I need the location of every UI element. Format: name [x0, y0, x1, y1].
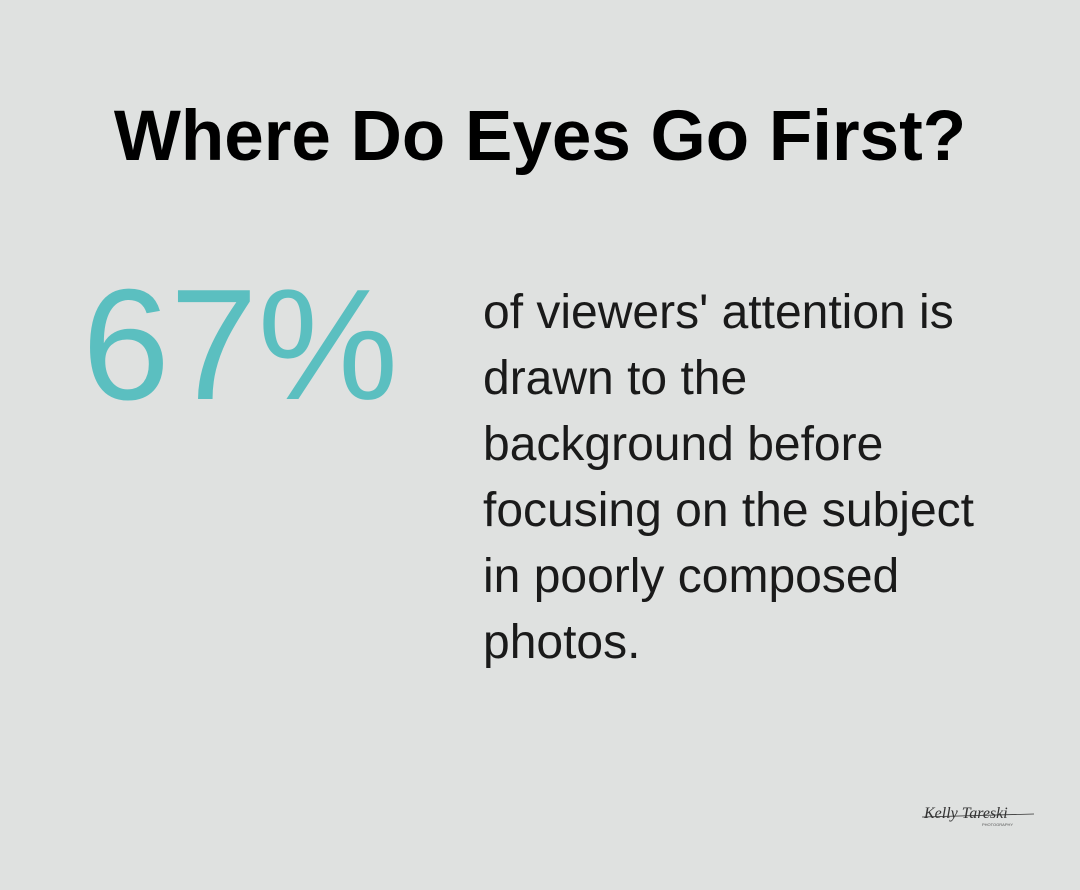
description text [483, 286, 974, 669]
description text: focusing on the subject [483, 484, 974, 537]
signature logo: Kelly Tareski [923, 805, 1008, 822]
title: Where Do Eyes Go First? [114, 97, 966, 176]
signature logo: PHOTOGRAPHY [982, 822, 1013, 827]
description text: background before [483, 418, 883, 471]
big statistic: 67% [82, 257, 398, 433]
description text: in poorly composed [483, 550, 899, 603]
description text: drawn to the [483, 352, 747, 405]
description text: photos. [483, 616, 640, 669]
signature logo [922, 805, 1034, 827]
description text: of viewers' attention is [483, 286, 954, 339]
